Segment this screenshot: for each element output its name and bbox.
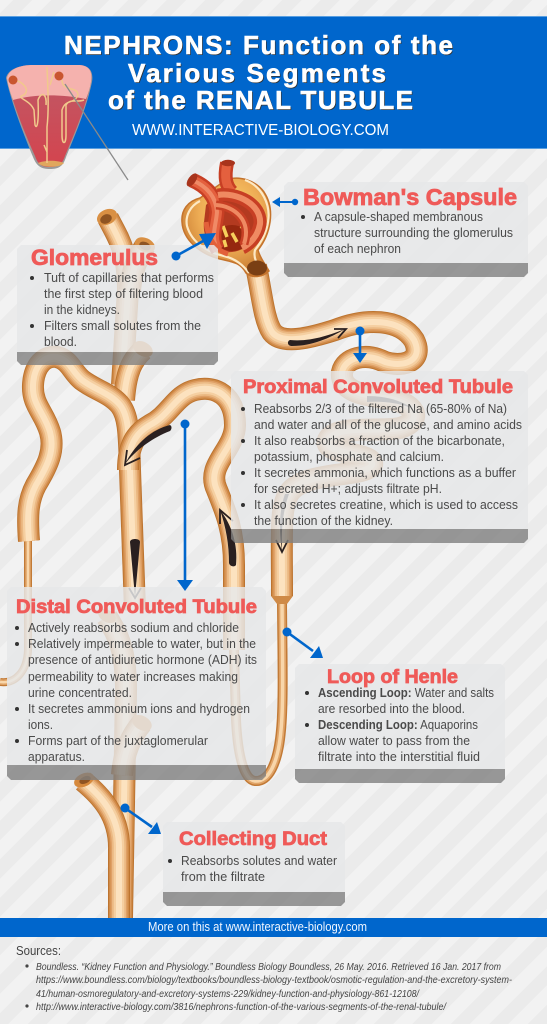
panel: collecting duct xyxy=(163,822,345,906)
text: collecting duct details: Reabsorbs solutes and water xyxy=(181,854,337,868)
footer link text: More on this at www.interactive-biology.com xyxy=(148,920,367,934)
lower branch 2 xyxy=(72,770,119,918)
text: glomerulus details xyxy=(30,271,214,349)
arrow: distal pointer xyxy=(177,420,193,591)
nephron tubule illustration xyxy=(0,206,417,918)
lower branch 1 xyxy=(122,712,155,775)
text: distal details: ions. xyxy=(28,718,53,732)
footer banner xyxy=(0,918,547,937)
text: Bowman's capsule details: structure surrounding the glomerulus xyxy=(314,226,513,240)
text: distal details: It secretes ammonium ions and hydrogen xyxy=(28,702,250,716)
source citations xyxy=(36,962,513,1013)
text: proximal details: It also reabsorbs a fraction of the bicarbonate, xyxy=(254,434,505,448)
text: distal details: Relatively impermeable to water, but in the xyxy=(28,637,256,651)
flow arrow distal xyxy=(125,425,172,465)
sources heading: Sources: xyxy=(16,943,61,958)
panel: glomerulus xyxy=(17,245,218,365)
collecting duct lower tube xyxy=(96,606,126,918)
source citations: 41/human-osmoregulatory-and-excretory-systems-229/kidney-function-and-physiology-861-12108/ xyxy=(36,989,420,1000)
text: proximal details: It also secretes creatine, which is used to access xyxy=(254,498,518,512)
text: distal details: Actively reabsorbs sodium and chloride xyxy=(28,621,239,635)
text: loop of Henle details xyxy=(305,686,494,764)
glomerulus capillary knot xyxy=(204,196,263,252)
panel: loop of Henle xyxy=(295,664,505,783)
text: glomerulus details: Filters small solutes from the xyxy=(44,319,201,333)
flow arrow pale upper xyxy=(367,396,412,408)
text: Bowman's capsule details xyxy=(301,210,513,256)
arrow: loop of Henle pointer xyxy=(282,628,323,658)
collecting duct upper tube xyxy=(94,206,128,385)
distal tube xyxy=(128,389,235,650)
text: collecting duct details xyxy=(168,854,337,884)
text: distal details: urine concentrated. xyxy=(28,686,132,700)
arrow: glomerulus pointer xyxy=(172,233,216,260)
heading: collecting duct: Collecting Duct xyxy=(179,828,328,850)
text: loop of Henle details: are resorbed into the blood. xyxy=(318,702,465,716)
source citations: http://www.interactive-biology.com/3816/nephrons-function-of-the-various-segments-of-the-renal-tubule/ xyxy=(36,1002,447,1013)
proximal tube xyxy=(256,266,417,596)
sources xyxy=(16,943,513,1013)
heading: glomerulus: Glomerulus xyxy=(31,245,158,270)
text: Bowman's capsule details: A capsule-shaped membranous xyxy=(314,210,483,224)
text: proximal details: and water and all of the glucose, and amino acids xyxy=(254,418,522,432)
text: glomerulus details: Tuft of capillaries that performs xyxy=(44,271,214,285)
panel: Bowman's capsule xyxy=(284,182,528,277)
flow arrow proximal xyxy=(288,329,346,346)
text: proximal details: Reabsorbs 2/3 of the filtered Na (65-80% of Na) xyxy=(254,402,507,416)
arrow: Bowman's capsule pointer xyxy=(272,197,298,207)
text: glomerulus details: the first step of filtering blood xyxy=(44,287,203,301)
text: distal details: permeability to water increases making xyxy=(28,670,238,684)
text: loop of Henle details: filtrate into the interstitial fluid xyxy=(318,750,480,764)
thin left tube xyxy=(0,540,28,682)
loop of Henle thin segment xyxy=(234,596,293,781)
text: proximal details: for secreted H+; adjusts filtrate pH. xyxy=(254,482,442,496)
tube branch upper xyxy=(130,234,157,290)
top banner xyxy=(0,16,547,149)
heading: proximal convoluted tubule: Proximal Convoluted Tubule xyxy=(243,377,513,398)
text: proximal details: the function of the kidney. xyxy=(254,514,393,528)
title: of the RENAL TUBULE xyxy=(108,85,413,115)
tube branch middle xyxy=(124,338,156,400)
flow arrow pale lower xyxy=(276,494,289,552)
text: loop of Henle details: Ascending Loop: Water and salts xyxy=(318,686,494,700)
text: distal details: Forms part of the juxtaglomerular xyxy=(28,734,208,748)
text: collecting duct details: from the filtrate xyxy=(181,870,265,884)
heading: loop of Henle: Loop of Henle xyxy=(327,666,458,688)
arrow: collecting duct pointer xyxy=(120,804,161,834)
icon: kidney section xyxy=(6,65,128,180)
text: proximal details: It secretes ammonia, which functions as a buffer xyxy=(254,466,516,480)
text: glomerulus details: blood. xyxy=(44,335,77,349)
text: loop of Henle details: Descending Loop: Aquaporins xyxy=(318,718,478,732)
text: proximal details xyxy=(241,402,522,528)
text: glomerulus details: in the kidneys. xyxy=(44,303,120,317)
text: Bowman's capsule details: of each nephron xyxy=(314,242,401,256)
heading: distal convoluted tubule: Distal Convoluted Tubule xyxy=(16,597,257,618)
text: loop of Henle details: allow water to pass from the xyxy=(318,734,470,748)
title: of the RENAL TUBULE xyxy=(109,86,414,116)
text: distal details xyxy=(15,621,257,764)
flow arrows xyxy=(125,329,412,598)
text: distal details: apparatus. xyxy=(28,750,85,764)
website url: WWW.INTERACTIVE-BIOLOGY.COM xyxy=(132,122,389,139)
title xyxy=(64,30,454,116)
left loop tube xyxy=(28,357,135,610)
arrow: proximal pointer xyxy=(353,326,367,363)
title: Various Segments xyxy=(129,59,387,89)
title: NEPHRONS: Function of the xyxy=(64,30,453,60)
flow arrow ascending xyxy=(220,510,236,566)
flow arrow descending xyxy=(129,539,141,598)
icon: Bowman's capsule and glomerulus xyxy=(182,160,271,277)
text: proximal details: potassium, phosphate and calcium. xyxy=(254,450,444,464)
title: NEPHRONS: Function of the xyxy=(65,31,454,61)
text: distal details: presence of antidiuretic hormone (ADH) its xyxy=(28,653,257,667)
heading: Bowman's capsule: Bowman's Capsule xyxy=(303,184,517,210)
panel: proximal convoluted tubule xyxy=(231,371,528,543)
title: Various Segments xyxy=(128,58,386,88)
panel: distal convoluted tubule xyxy=(7,587,266,780)
